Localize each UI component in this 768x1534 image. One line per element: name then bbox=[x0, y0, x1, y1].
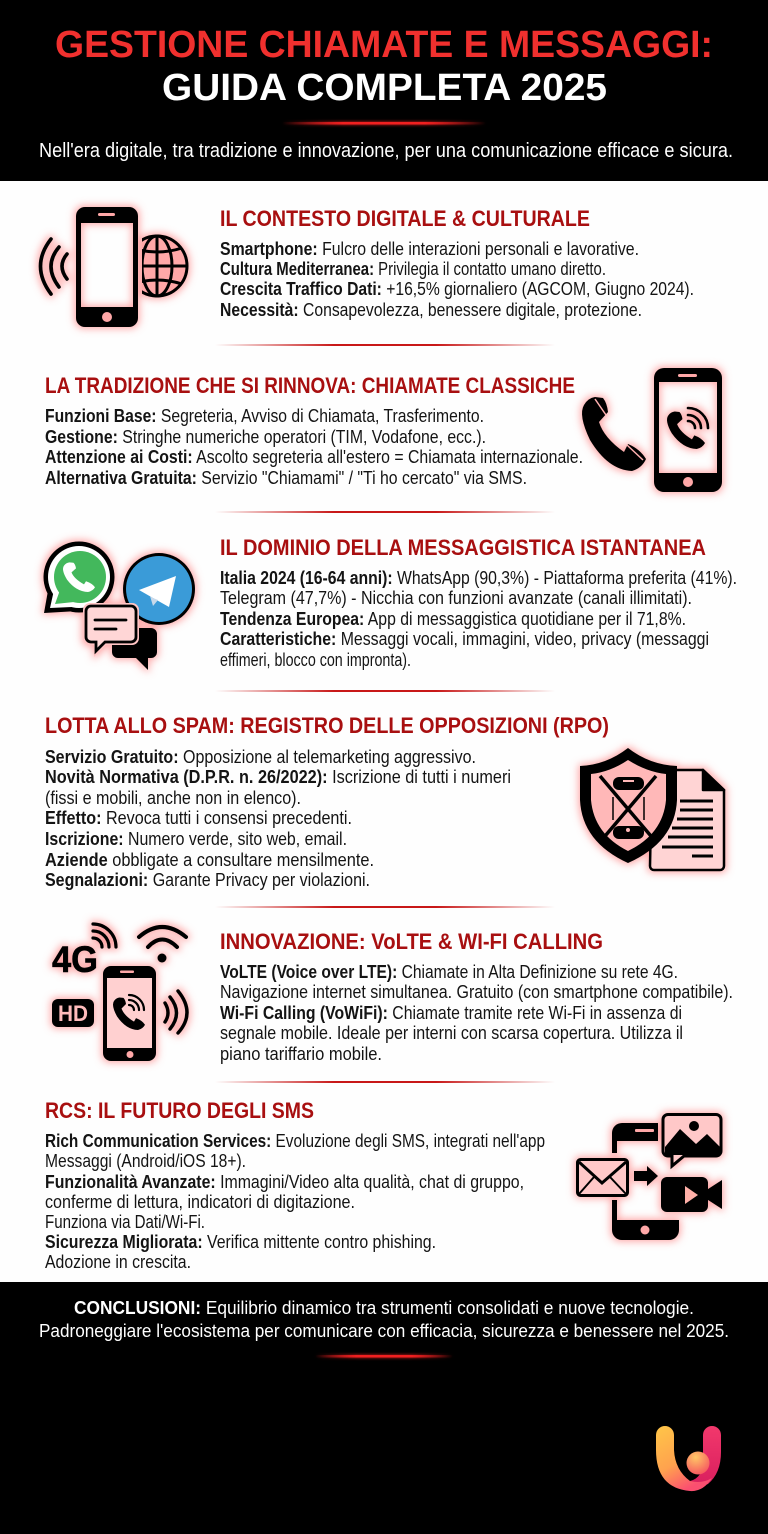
text block: Crescita Traffico Dati: +16,5% giornaliero (AGCOM, Giugno 2024). bbox=[220, 279, 694, 299]
text block bbox=[220, 239, 694, 320]
footer band bbox=[0, 1282, 768, 1534]
text block: Segnalazioni: Garante Privacy per violazioni. bbox=[45, 870, 370, 890]
icon: WhatsApp, Telegram and chat bubbles bbox=[44, 542, 195, 670]
heading: IL CONTESTO DIGITALE & CULTURALE bbox=[220, 206, 590, 231]
conclusions text bbox=[39, 1298, 729, 1341]
text block: Cultura Mediterranea: Privilegia il contatto umano diretto. bbox=[220, 259, 606, 279]
text block: piano tariffario mobile. bbox=[220, 1044, 382, 1064]
text block bbox=[220, 962, 733, 1064]
text block: Attenzione ai Costi: Ascolto segreteria all'estero = Chiamata internazionale. bbox=[45, 447, 583, 467]
footer divider bbox=[315, 1355, 453, 1358]
icon: 4G, Wi-Fi, HD and smartphone: HD bbox=[58, 1001, 88, 1026]
text block: Necessità: Consapevolezza, benessere digitale, protezione. bbox=[220, 300, 642, 320]
header divider bbox=[282, 122, 486, 124]
icon: 4G, Wi-Fi, HD and smartphone: 4G bbox=[52, 939, 98, 980]
text block: Telegram (47,7%) - Nicchia con funzioni avanzate (canali illimitati). bbox=[220, 588, 692, 608]
text block: Novità Normativa (D.P.R. n. 26/2022): Iscrizione di tutti i numeri bbox=[45, 767, 511, 787]
text block: Messaggi (Android/iOS 18+). bbox=[45, 1151, 246, 1171]
text block: Wi-Fi Calling (VoWiFi): Chiamate tramite rete Wi-Fi in assenza di bbox=[220, 1003, 682, 1023]
text block: effimeri, blocco con impronta). bbox=[220, 650, 411, 670]
text block: conferme di lettura, indicatori di digitazione. bbox=[45, 1192, 355, 1212]
text block: Alternativa Gratuita: Servizio "Chiamami" / "Ti ho cercato" via SMS. bbox=[45, 468, 527, 488]
text block: Caratteristiche: Messaggi vocali, immagini, video, privacy (messaggi bbox=[220, 629, 709, 649]
icon: shield and document bbox=[580, 748, 724, 870]
heading: IL DOMINIO DELLA MESSAGGISTICA ISTANTANEA bbox=[220, 535, 706, 560]
text block bbox=[45, 1131, 545, 1272]
panel: chiamate classiche bbox=[45, 368, 722, 492]
title: GUIDA COMPLETA 2025 bbox=[162, 67, 607, 109]
text block: Aziende obbligate a consultare mensilmente. bbox=[45, 850, 374, 870]
text block: Rich Communication Services: Evoluzione degli SMS, integrati nell'app bbox=[45, 1131, 545, 1151]
icon: smartphone with signal and globe bbox=[40, 207, 187, 327]
text block: Gestione: Stringhe numeriche operatori (TIM, Vodafone, ecc.). bbox=[45, 427, 486, 447]
text block: Iscrizione: Numero verde, sito web, email. bbox=[45, 829, 347, 849]
heading: LA TRADIZIONE CHE SI RINNOVA: CHIAMATE CLASSICHE bbox=[45, 373, 575, 398]
icon: smartphone with envelope, image and video bbox=[578, 1114, 722, 1240]
panel: RCS bbox=[45, 1098, 722, 1272]
panel: contesto digitale bbox=[40, 206, 694, 327]
text block bbox=[45, 747, 511, 890]
icon: 4G, Wi-Fi, HD and smartphone bbox=[52, 924, 187, 1061]
text block: Effetto: Revoca tutti i consensi precedenti. bbox=[45, 808, 352, 828]
panel: registro delle opposizioni bbox=[45, 713, 724, 890]
header band bbox=[0, 0, 768, 181]
title bbox=[55, 24, 713, 109]
text block bbox=[220, 568, 737, 670]
text block: Sicurezza Migliorata: Verifica mittente contro phishing. bbox=[45, 1232, 436, 1252]
panel: messaggistica istantanea bbox=[44, 535, 737, 670]
text block: (fissi e mobili, anche non in elenco). bbox=[45, 788, 301, 808]
text block: Tendenza Europea: App di messaggistica quotidiane per il 71,8%. bbox=[220, 609, 686, 629]
text block: segnale mobile. Ideale per interni con scarsa copertura. Utilizza il bbox=[220, 1023, 683, 1043]
conclusions text: Padroneggiare l'ecosistema per comunicare con efficacia, sicurezza e benessere nel 2025. bbox=[39, 1321, 729, 1341]
heading: LOTTA ALLO SPAM: REGISTRO DELLE OPPOSIZIONI (RPO) bbox=[45, 713, 609, 738]
panel: VoLTE e Wi-Fi Calling bbox=[52, 924, 733, 1064]
text block: VoLTE (Voice over LTE): Chiamate in Alta Definizione su rete 4G. bbox=[220, 962, 678, 982]
text block bbox=[45, 406, 583, 488]
text block: Smartphone: Fulcro delle interazioni personali e lavorative. bbox=[220, 239, 639, 259]
heading: RCS: IL FUTURO DEGLI SMS bbox=[45, 1098, 314, 1123]
text block: Servizio Gratuito: Opposizione al telemarketing aggressivo. bbox=[45, 747, 476, 767]
heading: INNOVAZIONE: VoLTE & WI-FI CALLING bbox=[220, 929, 603, 954]
text block: Funziona via Dati/Wi-Fi. bbox=[45, 1212, 205, 1232]
logo bbox=[656, 1426, 721, 1491]
conclusions text: CONCLUSIONI: Equilibrio dinamico tra strumenti consolidati e nuove tecnologie. bbox=[74, 1298, 694, 1318]
title: GESTIONE CHIAMATE E MESSAGGI: bbox=[55, 24, 713, 66]
text block: Funzionalità Avanzate: Immagini/Video alta qualità, chat di gruppo, bbox=[45, 1172, 524, 1192]
text block: Funzioni Base: Segreteria, Avviso di Chiamata, Trasferimento. bbox=[45, 406, 484, 426]
text block: Adozione in crescita. bbox=[45, 1252, 191, 1272]
icon: handset and smartphone bbox=[582, 368, 722, 492]
